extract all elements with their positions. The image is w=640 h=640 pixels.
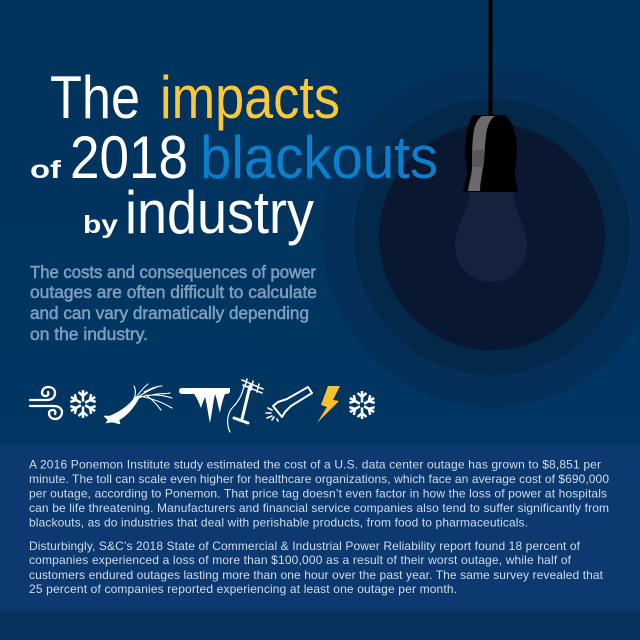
panel: footer band bbox=[0, 611, 640, 640]
body paragraph 1: minute. The toll can scale even higher for healthcare organizations, which face an average cost of $690,000 bbox=[29, 472, 609, 486]
lead paragraph: The costs and consequences of power bbox=[30, 262, 316, 282]
title: by bbox=[83, 211, 118, 239]
icon row: weather and outage bbox=[30, 379, 376, 432]
body paragraph 2: customers endured outages lasting more than one hour over the past year. The same survey revealed that bbox=[29, 568, 604, 582]
icon: wind bbox=[30, 387, 62, 419]
body paragraph 2: companies experienced a loss of more than $100,000 as a result of their worst outage, while half of bbox=[29, 553, 572, 567]
icon: snowflake left bbox=[69, 390, 97, 418]
icon: lamp cord bbox=[488, 0, 492, 116]
lead paragraph: outages are often difficult to calculate bbox=[30, 282, 317, 302]
icon: snowflake right bbox=[348, 391, 376, 419]
icon: lamp socket bbox=[463, 115, 518, 192]
body paragraph 2: Disturbingly, S&C’s 2018 State of Commercial & Industrial Power Reliability report found 18 percent of bbox=[29, 539, 581, 553]
title: blackouts bbox=[200, 124, 438, 191]
body paragraph 2: 25 percent of companies reported experiencing at least one outage per month. bbox=[29, 582, 457, 596]
title: industry bbox=[125, 179, 314, 246]
icon: utility pole bbox=[228, 379, 263, 432]
icon: lightning bolt bbox=[317, 386, 340, 423]
body paragraph 1 bbox=[29, 458, 609, 530]
icon: fallen tree bbox=[104, 384, 172, 424]
panel: body text band bbox=[0, 445, 640, 611]
body paragraph 1: can be life threatening. Manufacturers and financial service companies also tend to suffer significantly from bbox=[29, 501, 609, 515]
title: 2018 bbox=[70, 124, 188, 191]
body paragraph 1: blackouts, as do industries that deal with perishable products, from food to pharmaceuticals. bbox=[29, 516, 528, 530]
title: of bbox=[30, 156, 62, 184]
icon: flashlight bbox=[266, 387, 312, 421]
concentric dark glow circles bbox=[322, 67, 640, 407]
lead paragraph: on the industry. bbox=[30, 324, 148, 344]
body paragraph 1: A 2016 Ponemon Institute study estimated the cost of a U.S. data center outage has grown to $8,851 per bbox=[29, 458, 601, 472]
body paragraph 1: per outage, according to Ponemon. That price tag doesn’t even factor in how the loss of power at hospitals bbox=[29, 486, 607, 500]
lead paragraph: and can vary dramatically depending bbox=[30, 303, 309, 323]
body paragraph 2 bbox=[29, 539, 604, 596]
icon: light bulb glass bbox=[455, 190, 527, 282]
lead paragraph bbox=[30, 262, 317, 344]
title bbox=[30, 64, 438, 246]
title: impacts bbox=[160, 64, 340, 131]
icon: icicles bbox=[179, 388, 230, 423]
title: The bbox=[50, 64, 140, 131]
